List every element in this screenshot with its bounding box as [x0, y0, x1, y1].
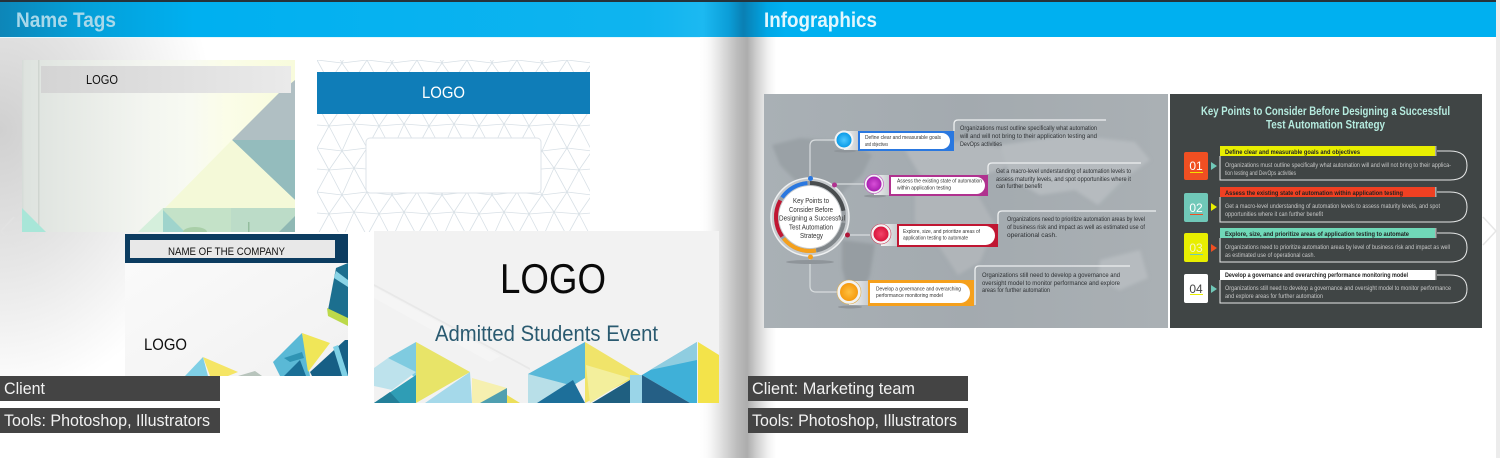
step 1: Define clear and measurable goals	[865, 135, 941, 141]
step 3: Organizations need to prioritize automation areas by level	[1007, 216, 1145, 223]
panel title: Test Automation Strategy	[1266, 120, 1386, 132]
step 4: Organizations still need to develop a governance and	[982, 272, 1121, 279]
logo text: LOGO	[144, 335, 187, 354]
central circle	[763, 170, 857, 264]
row 3: Explore, size, and prioritize areas of application testing to automate	[1225, 231, 1409, 238]
circle text: Test Automation	[789, 222, 833, 232]
step 4: performance monitoring model	[876, 293, 943, 299]
row 2: opportunities where it can further benefit	[1225, 211, 1323, 218]
circle text: Consider Before	[789, 205, 833, 214]
panel: name tag 3	[125, 234, 348, 376]
triangle decoration	[374, 342, 719, 403]
row 1: 01	[1189, 159, 1203, 173]
panel title: Key Points to Consider Before Designing a Successful	[1201, 106, 1450, 118]
row 3: as estimated use of operational cash.	[1225, 252, 1315, 259]
step 1	[834, 120, 1106, 152]
row 1: tion testing and DevOps activities	[1225, 170, 1296, 177]
circle text: Key Points to	[793, 196, 829, 205]
panel: name tag 2	[317, 60, 590, 232]
step 1: and objectives	[865, 142, 888, 148]
circle text: Designing a Successful	[779, 214, 845, 222]
arrow: previous	[1, 217, 14, 245]
caption: client left	[0, 376, 220, 401]
step 2: assess maturity levels, and spot opportunities where it	[996, 176, 1131, 183]
panel: infographic list version	[1170, 94, 1482, 328]
step 1: will and will not bring to their application testing and	[959, 133, 1098, 140]
circle text: Strategy	[800, 231, 823, 240]
world map	[772, 135, 1150, 305]
row 4: and explore areas for further automation	[1225, 293, 1323, 300]
caption: client right	[748, 376, 968, 401]
row 1	[1184, 146, 1467, 180]
step 2: Assess the existing state of automation	[897, 178, 982, 184]
row 3	[1184, 228, 1467, 262]
name field	[366, 138, 541, 193]
step 4: oversight model to monitor performance and explore	[982, 280, 1121, 287]
caption: client left: Client	[4, 379, 45, 398]
step 3: application testing to automate	[903, 236, 968, 242]
heading: Infographics: Infographics	[764, 9, 877, 32]
step 3: of business risk and impact as well as estimated use of	[1007, 224, 1145, 231]
row 1: Define clear and measurable goals and objectives	[1225, 149, 1360, 156]
row 1: Organizations must outline specifically what automation will and will not bring to their applica-	[1225, 162, 1451, 169]
panel: infographic radial version	[763, 94, 1168, 328]
row 4: Develop a governance and overarching performance monitoring model	[1225, 272, 1408, 279]
row 2: Assess the existing state of automation within application testing	[1225, 190, 1403, 197]
row 2: Get a macro-level understanding of automation levels to assess maturity levels, and spot	[1225, 203, 1440, 210]
caption: tools right: Tools: Photoshop, Illustrators	[752, 411, 957, 430]
caption: client right: Client: Marketing team	[752, 379, 915, 398]
company name text: NAME OF THE COMPANY	[168, 246, 286, 258]
step 1: Organizations must outline specifically what automation	[960, 125, 1098, 132]
step 2: within application testing	[897, 186, 951, 192]
panel title	[1201, 106, 1450, 132]
step 4: Develop a governance and overarching	[876, 286, 961, 292]
logo text: LOGO	[86, 72, 118, 87]
panel: name tag 1	[22, 60, 295, 232]
step 2: Get a macro-level understanding of automation levels to	[996, 168, 1131, 175]
row 4: Organizations still need to develop a governance and oversight model to monitor performance	[1225, 285, 1452, 292]
caption: tools left: Tools: Photoshop, Illustrators	[4, 411, 210, 430]
heading: Name Tags: Name Tags	[16, 9, 116, 32]
step 4: areas for further automation	[982, 287, 1050, 294]
row 3: 03	[1189, 241, 1203, 255]
step 1: DevOps activities	[960, 141, 1002, 148]
step 3: operational cash.	[1007, 232, 1057, 239]
step 4	[837, 266, 1130, 308]
row 2	[1184, 187, 1467, 222]
step 3: Explore, size, and prioritize areas of	[903, 229, 981, 235]
connector lines	[810, 140, 870, 292]
arrow: next	[1483, 217, 1496, 245]
row 4	[1184, 270, 1467, 303]
logo text: LOGO	[500, 255, 606, 302]
row 2: 02	[1189, 201, 1203, 215]
panel: name tag 4	[374, 231, 719, 403]
row 3: Organizations need to prioritize automation areas by level of business risk and impact as well	[1225, 244, 1450, 251]
circle text	[779, 196, 845, 240]
step 3	[871, 211, 1156, 247]
logo text: LOGO	[422, 83, 465, 102]
step 2: can further benefit	[996, 183, 1042, 190]
header band	[0, 0, 1496, 38]
event title: Admitted Students Event	[435, 321, 658, 346]
step 2	[864, 163, 1141, 198]
row 4: 04	[1189, 282, 1203, 296]
